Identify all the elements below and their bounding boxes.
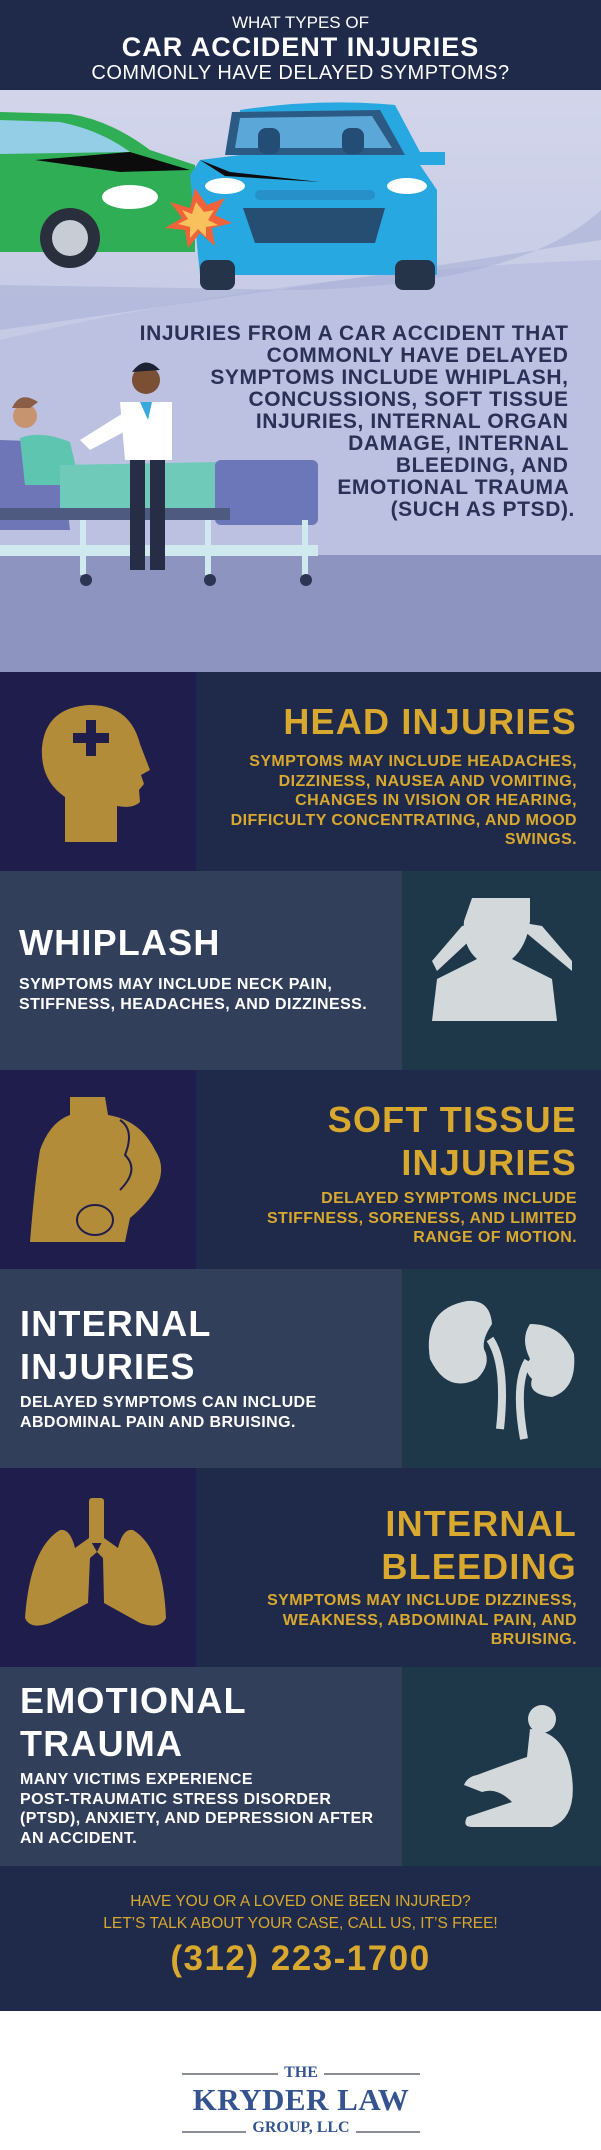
- hero illustration: [0, 90, 601, 672]
- text: [267, 1190, 577, 1246]
- panel: soft tissue: [0, 1070, 601, 1269]
- CTA: (312) 223-1700: [170, 1939, 431, 1978]
- hero text: DAMAGE, INTERNAL: [348, 432, 569, 455]
- heading: BLEEDING: [381, 1546, 577, 1587]
- text: RANGE OF MOTION.: [413, 1229, 577, 1246]
- icon: green car: [0, 112, 195, 268]
- hero text: BLEEDING, AND: [396, 454, 569, 477]
- CTA: HAVE YOU OR A LOVED ONE BEEN INJURED?: [130, 1893, 471, 1910]
- panel: internal injuries: [0, 1269, 601, 1468]
- heading: INTERNAL: [385, 1503, 577, 1544]
- panel: whiplash: [0, 871, 601, 1070]
- hero text: (SUCH AS PTSD).: [391, 498, 575, 521]
- hero text: COMMONLY HAVE DELAYED: [267, 344, 569, 367]
- hero text: INJURIES, INTERNAL ORGAN: [256, 410, 569, 433]
- icon: blue car: [190, 102, 445, 290]
- text: DIFFICULTY CONCENTRATING, AND MOOD: [231, 812, 577, 828]
- text: SWINGS.: [505, 831, 577, 848]
- text: ABDOMINAL PAIN AND BRUISING.: [20, 1414, 296, 1430]
- text: CHANGES IN VISION OR HEARING,: [295, 792, 577, 809]
- text: WEAKNESS, ABDOMINAL PAIN, AND: [283, 1612, 577, 1628]
- header: CAR ACCIDENT INJURIES: [122, 32, 479, 62]
- text: (PTSD), ANXIETY, AND DEPRESSION AFTER: [20, 1810, 374, 1827]
- hero text: EMOTIONAL TRAUMA: [337, 476, 569, 499]
- icon: kidneys: [402, 1269, 601, 1468]
- text: AN ACCIDENT.: [20, 1830, 137, 1846]
- icon: crash star: [165, 188, 232, 248]
- heading: INJURIES: [401, 1142, 577, 1183]
- heading: [328, 1099, 577, 1183]
- heading: EMOTIONAL: [20, 1680, 247, 1721]
- heading: INJURIES: [20, 1346, 196, 1387]
- text: DELAYED SYMPTOMS CAN INCLUDE: [20, 1394, 317, 1411]
- header: [0, 0, 601, 90]
- text: DIZZINESS, NAUSEA AND VOMITING,: [279, 772, 577, 790]
- panel: head injuries: [0, 672, 601, 871]
- header: COMMONLY HAVE DELAYED SYMPTOMS?: [91, 62, 510, 84]
- text: STIFFNESS, SORENESS, AND LIMITED: [267, 1210, 577, 1226]
- text: DELAYED SYMPTOMS INCLUDE: [321, 1190, 577, 1207]
- heading: INTERNAL: [20, 1303, 212, 1344]
- text: SYMPTOMS MAY INCLUDE HEADACHES,: [249, 753, 577, 770]
- hero text: INJURIES FROM A CAR ACCIDENT THAT: [140, 322, 569, 345]
- hero text: CONCUSSIONS, SOFT TISSUE: [248, 388, 569, 411]
- heading: SOFT TISSUE: [328, 1099, 577, 1140]
- heading: WHIPLASH: [19, 922, 221, 963]
- heading: TRAUMA: [20, 1723, 183, 1764]
- logo: GROUP, LLC: [252, 2119, 350, 2136]
- text: [20, 1771, 374, 1846]
- text: [231, 753, 577, 848]
- text: [20, 1394, 317, 1430]
- icon: doctor and patient on bed: [0, 362, 318, 586]
- icon: head: [0, 672, 196, 871]
- text: POST-TRAUMATIC STRESS DISORDER: [20, 1790, 331, 1808]
- icon: whiplash: [402, 871, 601, 1070]
- text: SYMPTOMS MAY INCLUDE DIZZINESS,: [267, 1592, 577, 1609]
- heading: [20, 1680, 247, 1764]
- icon: sitting person: [402, 1667, 601, 1866]
- hero text: SYMPTOMS INCLUDE WHIPLASH,: [210, 366, 569, 389]
- text: STIFFNESS, HEADACHES, AND DIZZINESS.: [19, 996, 367, 1012]
- logo: THE: [284, 2064, 318, 2081]
- logo: [182, 2064, 420, 2136]
- CTA: LET’S TALK ABOUT YOUR CASE, CALL US, IT’S FREE!: [103, 1915, 498, 1932]
- heading: [381, 1503, 577, 1587]
- text: MANY VICTIMS EXPERIENCE: [20, 1771, 253, 1788]
- heading: HEAD INJURIES: [283, 701, 577, 742]
- icon: lungs: [0, 1468, 196, 1667]
- heading: [20, 1303, 212, 1387]
- text: BRUISING.: [491, 1631, 577, 1648]
- text: [267, 1592, 577, 1648]
- text: [19, 976, 367, 1012]
- icon: back pain: [0, 1070, 196, 1269]
- header: WHAT TYPES OF: [232, 13, 369, 32]
- text: SYMPTOMS MAY INCLUDE NECK PAIN,: [19, 976, 332, 993]
- CTA: [0, 1866, 601, 2011]
- logo: KRYDER LAW: [193, 2082, 409, 2117]
- panel: internal bleeding: [0, 1468, 601, 1667]
- panel: emotional trauma: [0, 1667, 601, 1866]
